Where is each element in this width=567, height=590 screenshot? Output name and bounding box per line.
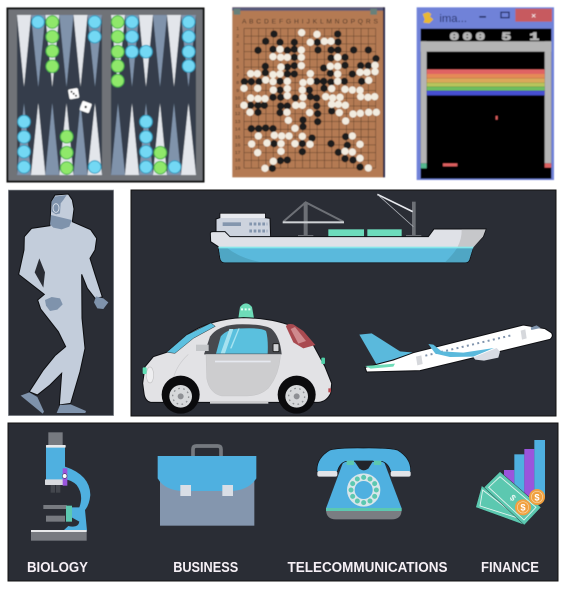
row numbers: 16 bbox=[235, 142, 241, 148]
row numbers: 18 bbox=[235, 158, 241, 164]
panel: breakout game window bbox=[417, 7, 554, 180]
engine bbox=[473, 348, 500, 361]
row numbers: 5 bbox=[236, 57, 239, 63]
row numbers: 13 bbox=[235, 119, 241, 125]
crane two bbox=[377, 194, 421, 237]
white stones bbox=[244, 33, 376, 168]
stage bbox=[43, 505, 67, 522]
bottom ring bbox=[45, 479, 67, 485]
window reflection bbox=[221, 328, 240, 353]
rear reflector bbox=[328, 388, 331, 392]
wing bbox=[428, 344, 494, 357]
roof lamp bbox=[238, 303, 254, 318]
column letters: A B C D E F G H I J K L M N O P Q R S bbox=[242, 19, 379, 26]
joint pin bbox=[62, 474, 67, 478]
row numbers: 17 bbox=[235, 150, 241, 156]
tail fin bbox=[359, 333, 414, 365]
icon: briefcase bbox=[158, 446, 256, 526]
objective lenses bbox=[51, 485, 60, 493]
green checkers bbox=[46, 16, 167, 174]
mirror bbox=[196, 345, 209, 351]
dial bbox=[347, 473, 380, 507]
handset bbox=[317, 448, 411, 472]
coins bbox=[515, 489, 545, 515]
front panel line bbox=[173, 354, 188, 378]
fuselage bbox=[365, 325, 552, 372]
case body bbox=[160, 475, 254, 526]
robot body bbox=[19, 194, 102, 405]
handset underside bbox=[317, 471, 411, 477]
door bbox=[206, 354, 281, 396]
tube bbox=[46, 447, 65, 480]
coins: $ bbox=[520, 503, 526, 513]
fist bbox=[45, 297, 63, 311]
row numbers: 9 bbox=[236, 88, 239, 94]
label: finance: FINANCE bbox=[481, 560, 539, 576]
bank notes: $ bbox=[508, 492, 518, 503]
panel: humanoid robot bbox=[8, 190, 114, 416]
panel: backgammon game bbox=[8, 8, 204, 182]
row numbers: 14 bbox=[235, 127, 241, 133]
hull water shade bbox=[219, 248, 473, 262]
icon: microscope bbox=[31, 432, 90, 541]
handle bbox=[193, 446, 221, 457]
rear wheel bbox=[278, 376, 316, 414]
row numbers: 2 bbox=[236, 34, 239, 40]
phone base bbox=[326, 509, 402, 519]
front wheel bbox=[162, 376, 200, 414]
row numbers: 19 bbox=[235, 166, 241, 172]
dice bbox=[68, 88, 92, 113]
score: 00051 bbox=[449, 32, 539, 44]
rear marker bbox=[321, 358, 325, 364]
label: business: BUSINESS bbox=[173, 560, 238, 576]
icon: cargo ship bbox=[210, 194, 486, 263]
panel: vehicles bbox=[131, 190, 556, 416]
doors bbox=[416, 329, 527, 365]
phone body bbox=[326, 462, 402, 508]
paddle bbox=[443, 163, 457, 166]
row numbers: 8 bbox=[236, 80, 239, 86]
eye ring bbox=[53, 204, 59, 212]
sill bbox=[210, 401, 268, 404]
tail stabiliser bbox=[365, 364, 395, 369]
icon: finance bbox=[476, 440, 545, 525]
crane one bbox=[283, 202, 344, 237]
ball bbox=[496, 116, 498, 120]
row numbers: 3 bbox=[236, 41, 239, 47]
microscope arm bbox=[63, 467, 90, 531]
panel: go board bbox=[232, 7, 385, 177]
label: biology: BIOLOGY bbox=[27, 560, 88, 576]
row numbers: 12 bbox=[235, 111, 241, 117]
row numbers: 10 bbox=[235, 96, 241, 102]
side window bbox=[216, 328, 268, 354]
row numbers: 6 bbox=[236, 65, 239, 71]
row numbers: 7 bbox=[236, 72, 239, 78]
ship hull bbox=[210, 229, 486, 263]
window latch bbox=[273, 344, 279, 352]
flap bbox=[158, 456, 256, 491]
hull stern shade bbox=[457, 229, 486, 247]
icon: self driving car bbox=[143, 303, 332, 414]
back foot bbox=[21, 392, 44, 414]
board points bbox=[17, 15, 196, 175]
cockpit bbox=[531, 325, 541, 330]
coins: $ bbox=[534, 492, 540, 502]
row numbers: 15 bbox=[235, 134, 241, 140]
rainbow bricks bbox=[427, 69, 545, 95]
windshield bbox=[167, 323, 215, 353]
base bbox=[31, 530, 87, 541]
window title bar: ima... bbox=[439, 13, 467, 25]
black stones bbox=[244, 34, 376, 168]
arm gap bbox=[35, 258, 45, 288]
front marker bbox=[143, 367, 147, 374]
car body bbox=[143, 318, 332, 402]
waterline bbox=[218, 247, 473, 248]
right hand bbox=[94, 296, 108, 309]
window row bbox=[425, 335, 511, 356]
icon: airplane bbox=[359, 325, 552, 372]
top ring bbox=[46, 445, 66, 448]
clasps bbox=[180, 485, 233, 496]
window title bar bbox=[423, 9, 552, 25]
eyepiece bbox=[48, 432, 63, 445]
focus knob bbox=[66, 506, 72, 522]
purple joint bbox=[63, 468, 67, 486]
front foot bbox=[57, 404, 86, 413]
window frame bbox=[204, 324, 282, 354]
bar chart bbox=[504, 440, 545, 499]
row numbers: 4 bbox=[236, 49, 239, 55]
icon: telephone bbox=[317, 448, 411, 519]
door handle strip bbox=[215, 361, 271, 362]
panel: industries bbox=[8, 423, 558, 581]
label: telecommunications: TELECOMMUNICATIONS bbox=[288, 560, 448, 576]
window title bar: × bbox=[531, 10, 536, 20]
hull water section bbox=[219, 248, 473, 262]
headlight bbox=[146, 367, 154, 383]
containers bbox=[328, 229, 402, 237]
tail light bbox=[286, 324, 315, 348]
base strip bbox=[326, 508, 402, 511]
grid lines bbox=[244, 28, 376, 168]
cradle bbox=[347, 461, 381, 470]
row numbers: 11 bbox=[235, 103, 240, 109]
ship cabin bbox=[216, 213, 271, 238]
neck and head shade bbox=[50, 215, 72, 229]
row numbers: 1 bbox=[236, 26, 239, 32]
blue checkers bbox=[18, 16, 195, 173]
